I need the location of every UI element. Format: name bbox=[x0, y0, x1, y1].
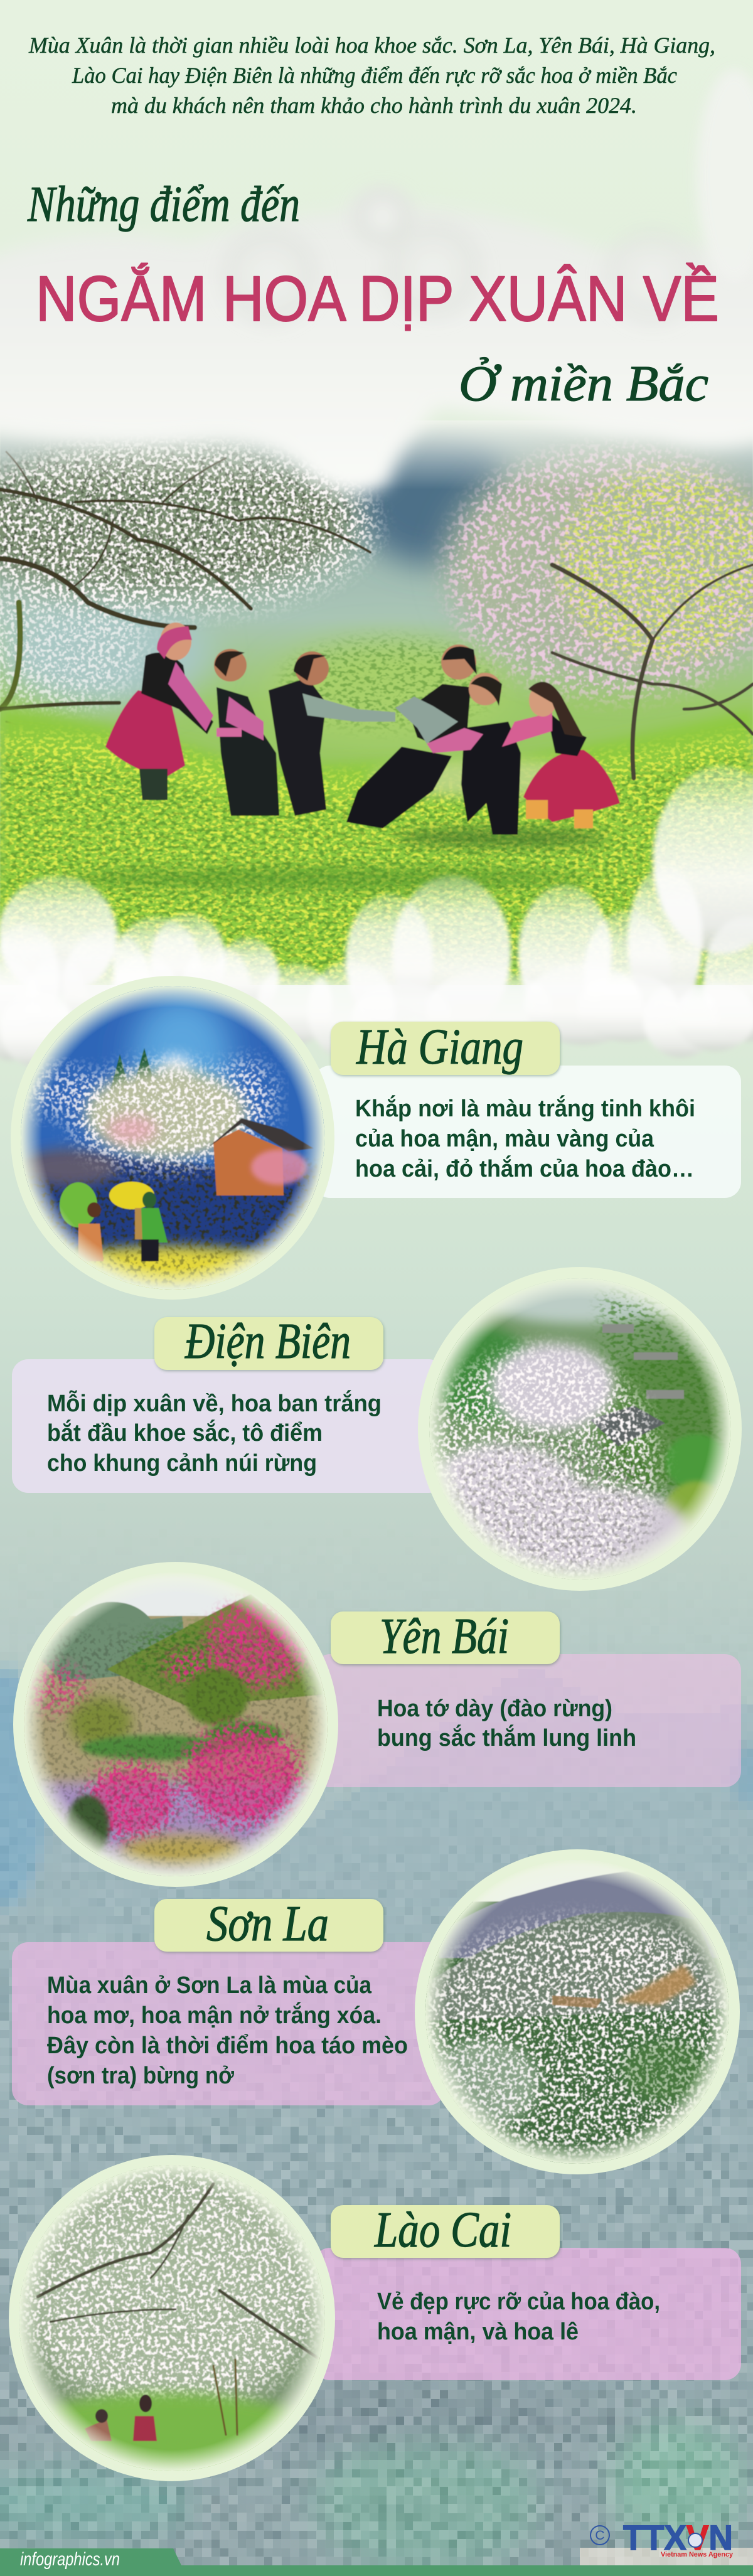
description text: bắt đầu khoe sắc, tô điểm bbox=[47, 1419, 323, 1446]
panel: Yên Bái description bbox=[314, 1654, 741, 1787]
hazy background bbox=[0, 596, 213, 709]
section: Lào Cai bbox=[9, 2152, 741, 2481]
section: Hà Giang bbox=[11, 976, 741, 1301]
section: Sơn La bbox=[12, 1849, 740, 2174]
description text bbox=[47, 1972, 408, 2089]
description text bbox=[377, 2289, 660, 2345]
right tree canopy bbox=[446, 446, 753, 778]
left tree canopy bbox=[0, 439, 376, 753]
description text: bung sắc thắm lung linh bbox=[377, 1724, 636, 1751]
description text bbox=[377, 1696, 636, 1751]
panel: Sơn La description bbox=[12, 1942, 445, 2105]
description text: Vẻ đẹp rực rỡ của hoa đào, bbox=[377, 2289, 660, 2315]
footer site name: infographics.vn bbox=[20, 2549, 120, 2570]
child 2 bbox=[214, 649, 279, 816]
panel: Điện Biên description bbox=[12, 1359, 445, 1493]
section: Điện Biên bbox=[12, 1267, 742, 1591]
clouds: lower band under the photo bbox=[0, 766, 753, 1067]
child 4: leaning boy bbox=[346, 644, 477, 828]
child 3 bbox=[269, 651, 395, 816]
logo: TTXVN: Vietnam News Agency bbox=[661, 2551, 734, 2558]
photo: Sơn La bbox=[414, 1849, 740, 2174]
title bbox=[27, 177, 719, 412]
section: Yên Bái bbox=[13, 1562, 741, 1887]
panel: Lào Cai description bbox=[314, 2248, 741, 2380]
photo: Yên Bái bbox=[13, 1562, 338, 1887]
intro text: Lào Cai hay Điện Biên là những điểm đến rực rỡ sắc hoa ở miền Bắc bbox=[72, 63, 677, 88]
photo: Lào Cai bbox=[9, 2152, 335, 2481]
description text: Khắp nơi là màu trắng tinh khôi bbox=[355, 1094, 695, 1122]
logo: TTXVN: TTXVN bbox=[623, 2518, 733, 2557]
clouds: top fog band bbox=[0, 69, 753, 494]
description text: Mùa xuân ở Sơn La là mùa của bbox=[47, 1972, 372, 1999]
label: Hà Giang: Hà Giang bbox=[356, 1020, 523, 1075]
description text: hoa mơ, hoa mận nở trắng xóa. bbox=[47, 2001, 382, 2029]
label: Sơn La bbox=[154, 1896, 383, 1952]
intro text: Mùa Xuân là thời gian nhiều loài hoa khoe sắc. Sơn La, Yên Bái, Hà Giang, bbox=[28, 33, 715, 58]
description text: hoa cải, đỏ thắm của hoa đào… bbox=[355, 1155, 694, 1182]
child 5 bbox=[427, 673, 521, 835]
intro text bbox=[28, 33, 715, 118]
label: Lào Cai: Lào Cai bbox=[374, 2203, 511, 2258]
photo: Hà Giang bbox=[11, 976, 334, 1301]
distant mountain bbox=[351, 427, 515, 565]
label: Sơn La: Sơn La bbox=[206, 1896, 329, 1952]
intro text: mà du khách nên tham khảo cho hành trình du xuân 2024. bbox=[111, 93, 637, 118]
photo: Điện Biên bbox=[418, 1267, 742, 1591]
description text bbox=[47, 1389, 382, 1477]
child 6: girl in red skirt bbox=[502, 681, 620, 828]
description text bbox=[355, 1094, 695, 1182]
child 1: girl in red skirt bbox=[105, 623, 213, 800]
logo: TTXVN: C bbox=[595, 2528, 605, 2543]
description text: (sơn tra) bừng nở bbox=[47, 2063, 235, 2089]
title line 3: Ở miền Bắc bbox=[459, 356, 708, 412]
label: Yên Bái bbox=[331, 1609, 560, 1664]
background: pixelated mountains bbox=[0, 1660, 753, 2565]
grass bbox=[0, 709, 753, 985]
panel: Hà Giang description bbox=[314, 1066, 741, 1198]
label: Điện Biên: Điện Biên bbox=[184, 1314, 351, 1369]
green bushes bbox=[270, 640, 508, 740]
description text: cho khung cảnh núi rừng bbox=[47, 1450, 317, 1477]
description text: Hoa tớ dày (đào rừng) bbox=[377, 1696, 612, 1722]
description text: hoa mận, và hoa lê bbox=[377, 2319, 579, 2345]
main photo: children playing among blossoms bbox=[0, 420, 753, 985]
title line 1: Những điểm đến bbox=[27, 177, 300, 232]
footer bar bbox=[0, 2548, 753, 2576]
description text: của hoa mận, màu vàng của bbox=[355, 1126, 654, 1152]
label: Yên Bái: Yên Bái bbox=[380, 1609, 509, 1664]
description text: Đây còn là thời điểm hoa táo mèo bbox=[47, 2033, 408, 2059]
description text: Mỗi dịp xuân về, hoa ban trắng bbox=[47, 1389, 382, 1417]
